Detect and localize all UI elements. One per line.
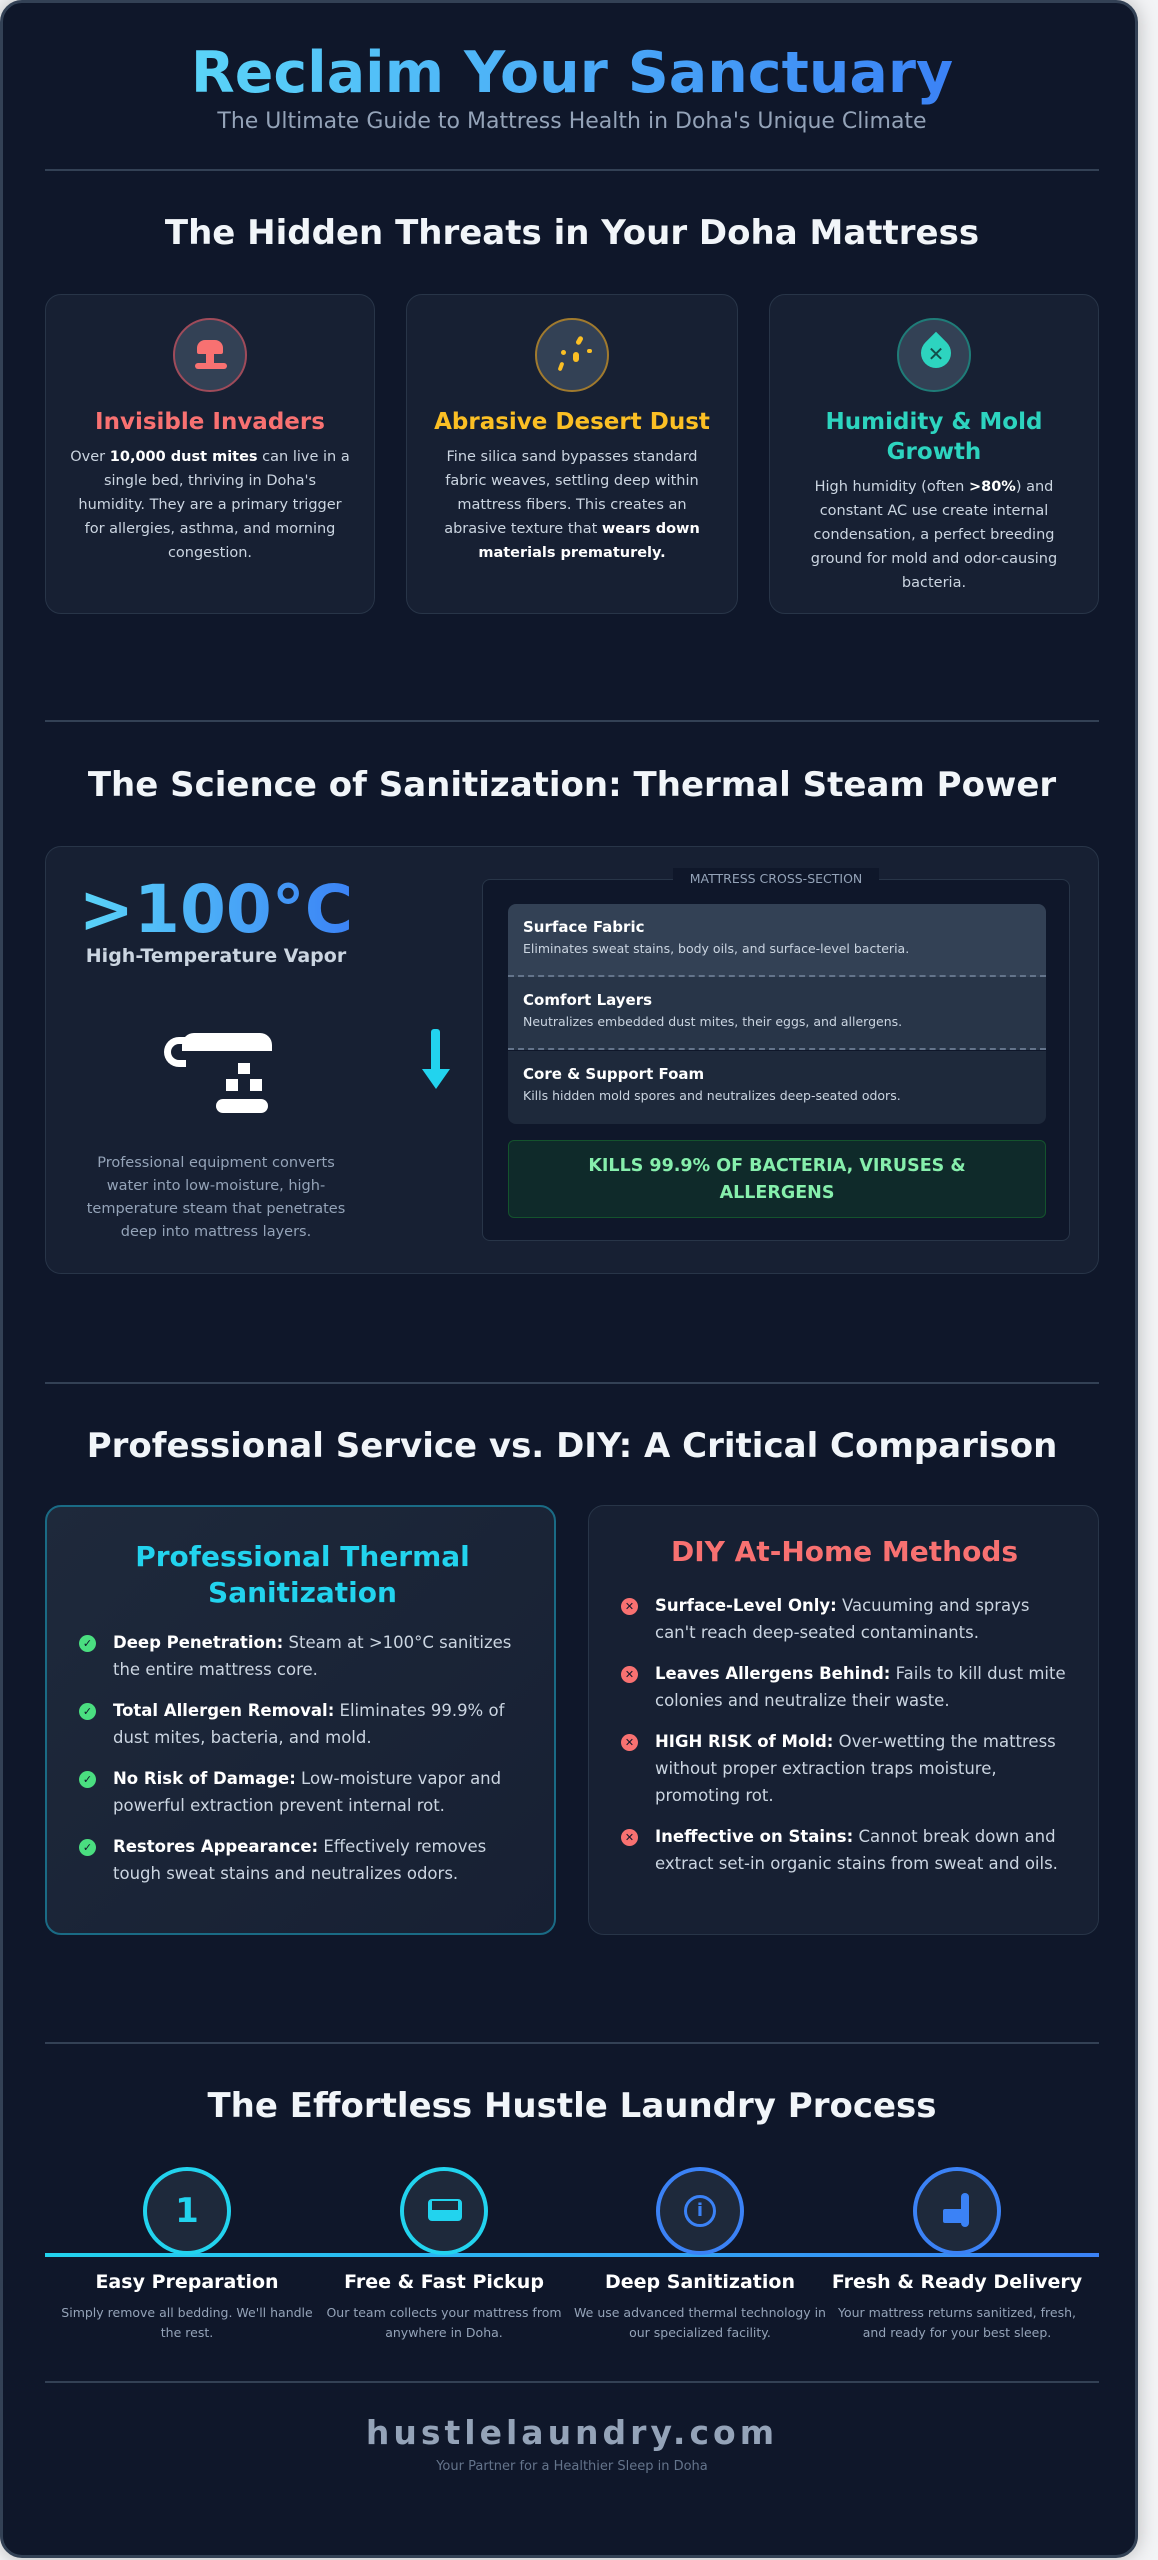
panel: professional <box>45 1505 556 1935</box>
timeline line <box>45 2253 1099 2257</box>
list item: ✕ <box>625 1831 634 1844</box>
list item: ✓ <box>83 1705 92 1718</box>
label: MATTRESS CROSS-SECTION <box>690 871 862 886</box>
list item: ✓ <box>83 1773 92 1786</box>
layer: core: Kills hidden mold spores and neutralizes deep-seated odors. <box>523 1088 901 1103</box>
icon: steamer <box>164 1033 272 1113</box>
list item: ✕ <box>625 1668 634 1681</box>
layer: core: Core & Support Foam <box>523 1065 704 1083</box>
icon: sand <box>535 318 609 392</box>
list item: Leaves Allergens Behind: Fails to kill dust mite colonies and neutralize their waste. <box>655 1664 1066 1710</box>
step 3 icon <box>656 2167 744 2255</box>
step 1 text: Easy Preparation <box>95 2271 279 2293</box>
layer: comfort: Comfort Layers <box>523 991 652 1009</box>
list item: ✕ <box>625 1736 634 1749</box>
card: desert dust <box>406 294 738 614</box>
panel title: Professional Thermal <box>135 1540 470 1573</box>
list item: Deep Penetration: Steam at >100°C sanitizes the entire mattress core. <box>113 1633 511 1679</box>
panel title: DIY At-Home Methods <box>671 1535 1018 1568</box>
list item: Restores Appearance: Effectively removes tough sweat stains and neutralizes odors. <box>113 1837 486 1883</box>
description: Professional equipment converts water into low-moisture, high-temperature steam that penetrates deep into mattress layers. <box>87 1155 345 1240</box>
big stat: >100°C <box>79 871 353 948</box>
heading: comparison: Professional Service vs. DIY: A Critical Comparison <box>87 1426 1057 1466</box>
callout: kills: KILLS 99.9% OF BACTERIA, VIRUSES & <box>588 1156 966 1176</box>
card: humidity <box>769 294 1099 614</box>
step 1 icon: 1 <box>175 2191 199 2231</box>
icon: drop <box>897 318 971 392</box>
step 4 desc: Your mattress returns sanitized, fresh, and ready for your best sleep. <box>838 2305 1076 2340</box>
panel: thermal steam <box>45 846 1099 1274</box>
card body: High humidity (often >80%) and constant AC use create internal condensation, a perfect breeding ground for mold and odor-causing bacteria. <box>811 479 1057 591</box>
card body: Fine silica sand bypasses standard fabric weaves, settling deep within mattress fibers. This creates an abrasive texture that wears down materials prematurely. <box>444 449 700 561</box>
panel: diy <box>588 1505 1099 1935</box>
list item: HIGH RISK of Mold: Over-wetting the mattress without proper extraction traps moisture, promoting rot. <box>655 1732 1056 1805</box>
arrow: down <box>422 1029 450 1089</box>
icon: drop: ✕ <box>928 342 944 366</box>
icon: dust mite <box>173 318 247 392</box>
layer: comfort <box>508 977 1046 1050</box>
list item: ✓ <box>83 1841 92 1854</box>
footer: tagline: Your Partner for a Healthier Sleep in Doha <box>436 2459 708 2474</box>
list item: No Risk of Damage: Low-moisture vapor and powerful extraction prevent internal rot. <box>113 1769 501 1815</box>
card title: Abrasive Desert Dust <box>434 409 710 435</box>
step 1 icon <box>143 2167 231 2255</box>
layer: surface <box>508 904 1046 977</box>
panel title <box>135 1540 470 1609</box>
step 4 text: Fresh & Ready Delivery <box>832 2271 1082 2293</box>
card title: Humidity & Mold <box>826 409 1042 435</box>
step 3 text: Deep Sanitization <box>605 2271 795 2293</box>
step 3 icon: i <box>697 2200 703 2221</box>
title: Reclaim Your Sanctuary <box>191 40 953 106</box>
list item: Ineffective on Stains: Cannot break down and extract set-in organic stains from sweat and oils. <box>655 1827 1058 1873</box>
heading: science: The Science of Sanitization: Thermal Steam Power <box>88 765 1056 805</box>
heading: hidden threats: The Hidden Threats in Your Doha Mattress <box>165 213 979 253</box>
card body: Over 10,000 dust mites can live in a single bed, thriving in Doha's humidity. They are a primary trigger for allergies, asthma, and morning congestion. <box>70 449 350 561</box>
list item: ✕ <box>625 1600 634 1613</box>
heading: process: The Effortless Hustle Laundry Process <box>207 2086 937 2126</box>
cross-section box <box>482 879 1070 1241</box>
list item: ✓ <box>83 1637 92 1650</box>
layer: core <box>508 1051 1046 1124</box>
card title: Growth <box>887 439 981 465</box>
step 2 desc: Our team collects your mattress from anywhere in Doha. <box>326 2305 562 2340</box>
layer: comfort: Neutralizes embedded dust mites, their eggs, and allergens. <box>523 1014 902 1029</box>
step 2 text: Free & Fast Pickup <box>344 2271 544 2293</box>
step 3 desc: We use advanced thermal technology in our specialized facility. <box>574 2305 826 2340</box>
stat label: High-Temperature Vapor <box>86 945 346 967</box>
layer: surface: Eliminates sweat stains, body oils, and surface-level bacteria. <box>523 941 909 956</box>
card title: Invisible Invaders <box>95 409 325 435</box>
subtitle: The Ultimate Guide to Mattress Health in Doha's Unique Climate <box>217 109 927 134</box>
layer: surface: Surface Fabric <box>523 918 644 936</box>
step 1 desc: Simply remove all bedding. We'll handle the rest. <box>61 2305 313 2340</box>
card title <box>826 409 1042 465</box>
panel title: Sanitization <box>208 1576 397 1609</box>
callout: kills: ALLERGENS <box>720 1183 834 1203</box>
list item: Total Allergen Removal: Eliminates 99.9% of dust mites, bacteria, and mold. <box>113 1701 504 1747</box>
callout: kills <box>508 1140 1046 1218</box>
step 4 icon <box>913 2167 1001 2255</box>
list item: Surface-Level Only: Vacuuming and sprays can't reach deep-seated contaminants. <box>655 1596 1030 1642</box>
footer: domain: hustlelaundry.com <box>366 2413 778 2452</box>
card: invisible invaders <box>45 294 375 614</box>
label <box>673 868 879 890</box>
step 2 icon <box>400 2167 488 2255</box>
